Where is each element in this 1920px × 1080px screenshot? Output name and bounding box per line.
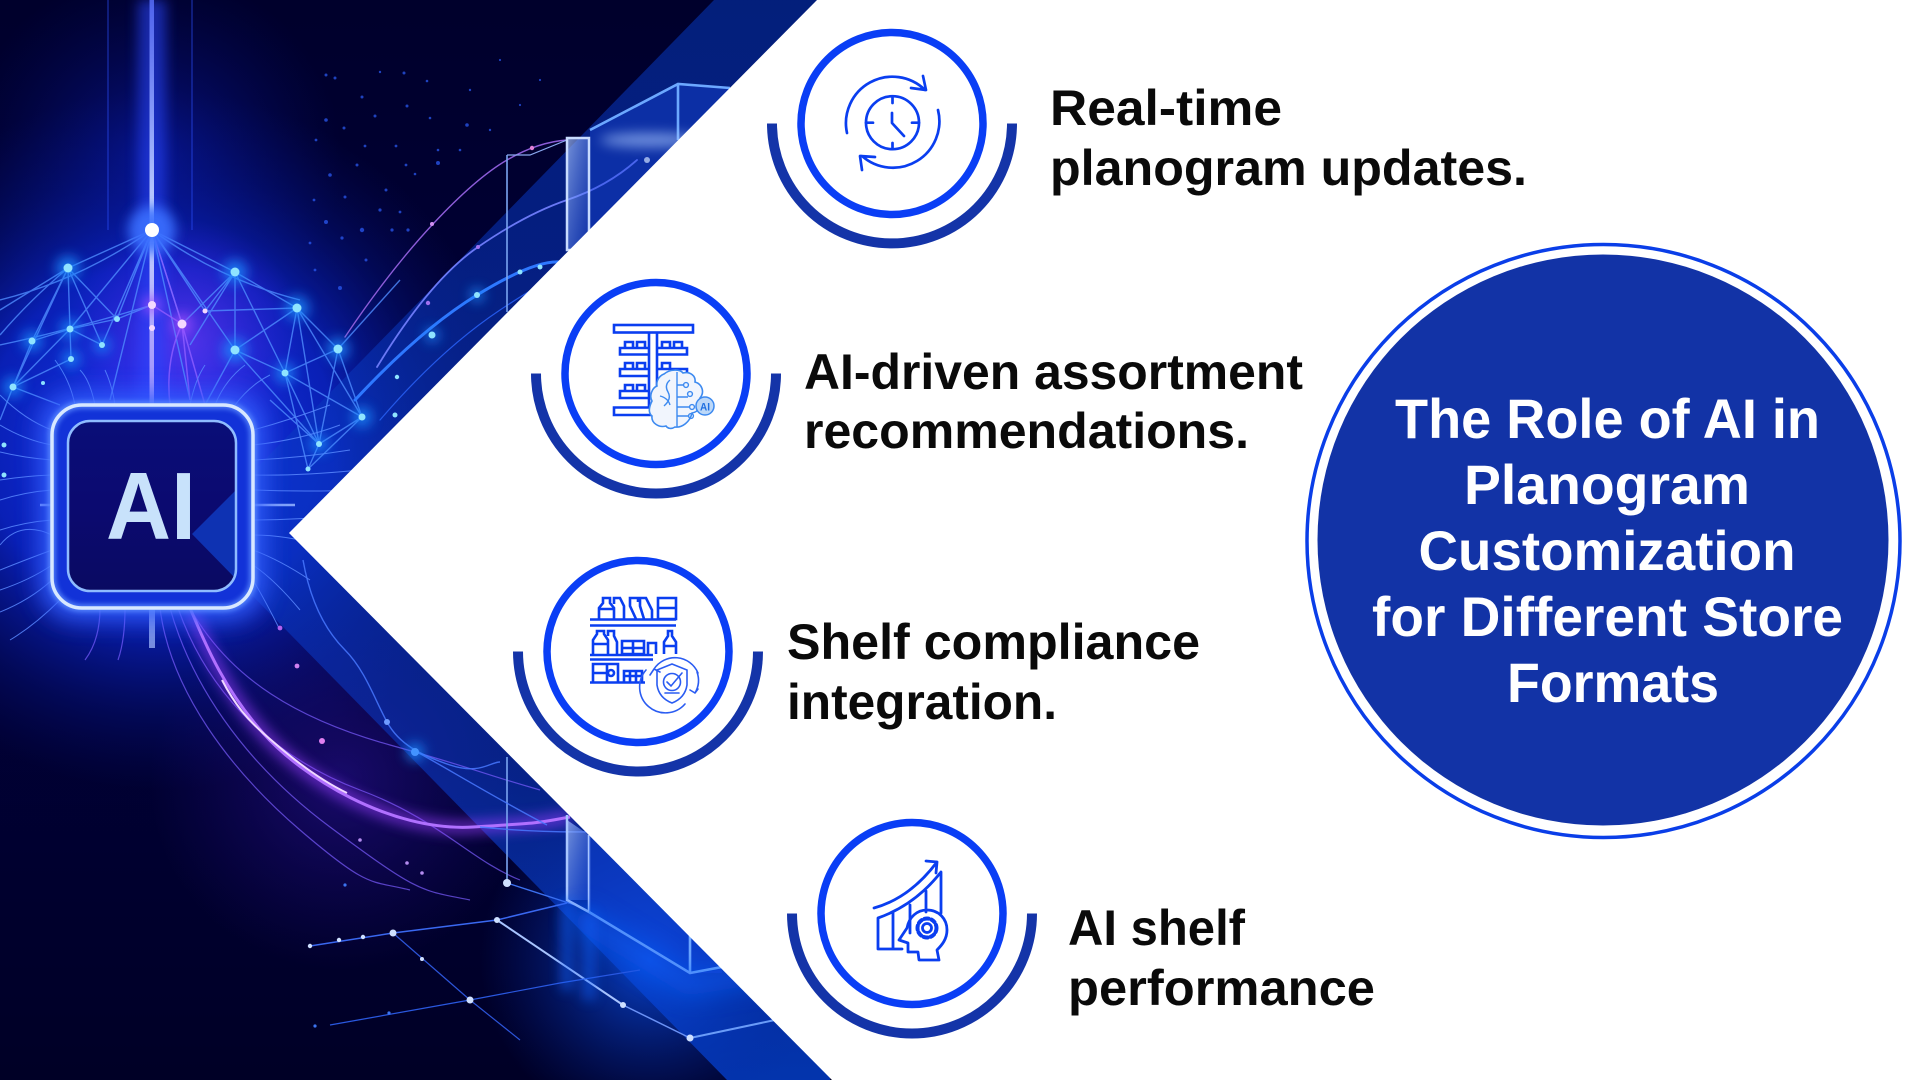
scattered data dots [309,59,541,290]
label 2: recommendations. [804,403,1249,459]
icon: clock with refresh arrows [846,76,939,170]
icon: shelf and AI brain [614,325,714,428]
lower stream lines [303,560,640,832]
upper data streams [345,140,640,420]
title text: Planogram [1464,453,1750,516]
icon: growth chart and thinking head [874,861,947,960]
icon: stocked shelves and compliance shield [590,598,698,713]
label 3: Shelf compliance [787,614,1200,670]
title circle [1307,244,1900,838]
icon ring 3 [518,560,758,772]
AI chip [40,393,265,620]
translucent blue chevron band [192,0,830,1080]
item 3: shelf compliance integration [518,560,1200,772]
network nodes [2,146,650,761]
panel: AI technology background [0,0,840,1080]
label 1: planogram updates. [1050,140,1527,196]
purple energy arc [190,608,570,827]
floor grid lines [310,883,775,1040]
title text: for Different Store [1372,585,1843,648]
item 4: AI shelf performance [792,822,1375,1034]
title text: The Role of AI in [1395,387,1820,450]
item 2: AI-driven assortment recommendations [536,282,1303,494]
icon ring 2 [536,282,776,494]
title text: Formats [1507,651,1719,714]
item 1: real-time planogram updates [772,32,1527,243]
label 4: AI shelf [1068,900,1245,956]
title text: Customization [1418,519,1796,582]
label 3: integration. [787,674,1057,730]
label 2: AI-driven assortment [804,344,1303,400]
label 4: performance [1068,960,1375,1016]
label 1: Real-time [1050,80,1282,136]
icon ring 1 [772,32,1012,243]
icon: shelf and AI brain: AI [700,402,710,414]
AI chip label: AI [106,453,196,560]
glass panel structures [567,84,780,1035]
icon ring 4 [792,822,1032,1034]
